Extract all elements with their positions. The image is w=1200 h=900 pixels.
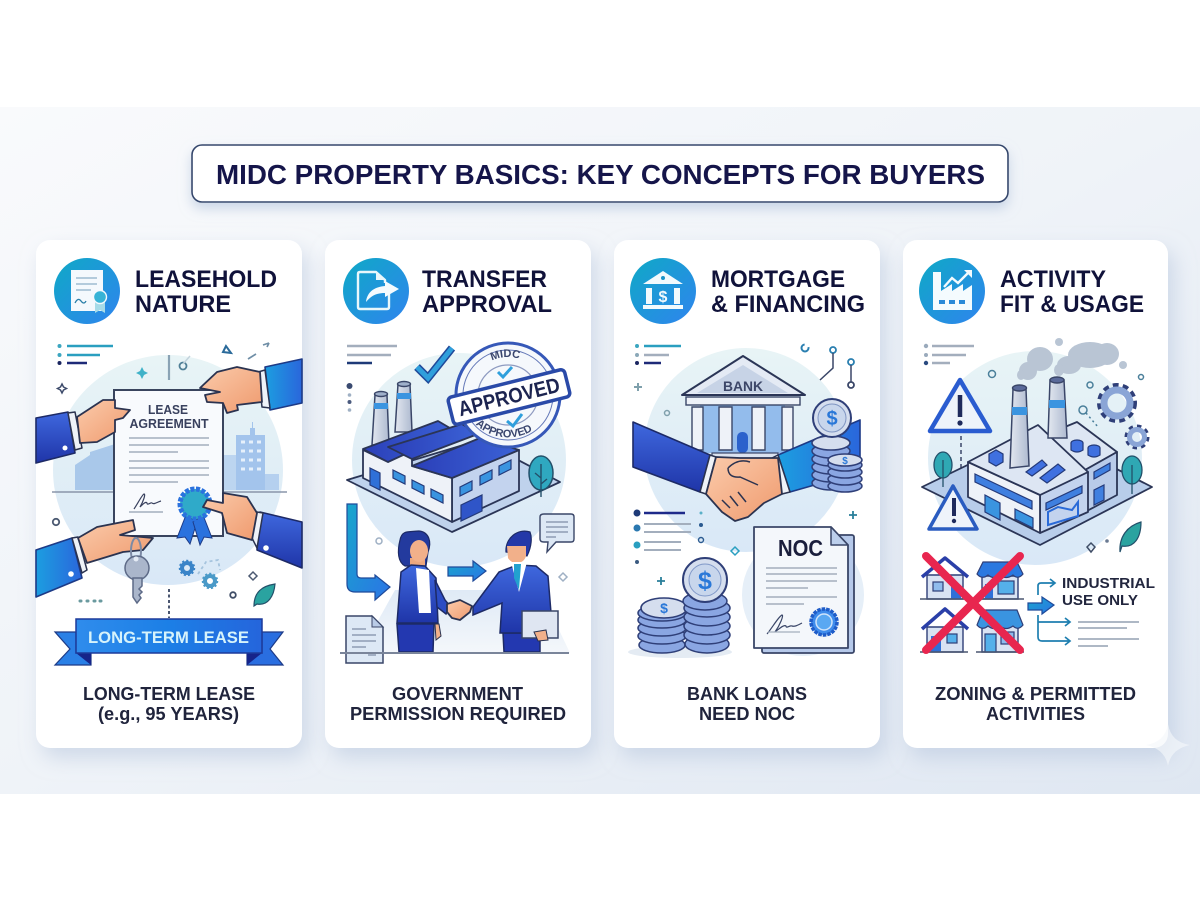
gears <box>1100 386 1147 447</box>
right arrow <box>448 561 486 581</box>
chimneys <box>1010 377 1067 468</box>
stamp: MIDC approved: MIDC <box>490 349 520 360</box>
chimneys <box>372 382 412 445</box>
NOC document: NOC <box>778 535 823 561</box>
panel: leasehold nature <box>36 240 302 748</box>
industrial use only label <box>1062 576 1155 646</box>
lease agreement document <box>114 390 223 536</box>
speech bubble <box>540 514 574 552</box>
bank building: BANK <box>723 378 763 394</box>
heading: & FINANCING <box>711 291 865 318</box>
coin stacks: $ <box>826 408 838 430</box>
red cross <box>926 556 1020 650</box>
banner: long-term lease: LONG-TERM LEASE <box>88 628 249 647</box>
small marks <box>1087 539 1109 552</box>
hand with key <box>36 520 153 603</box>
floor line <box>340 652 569 654</box>
icon: key <box>125 538 149 603</box>
list marks <box>924 344 974 365</box>
list marks lower <box>634 510 857 585</box>
caption: (e.g., 95 YEARS) <box>98 704 239 724</box>
house two <box>920 609 968 652</box>
illustration backdrop circle <box>928 351 1142 565</box>
caption <box>350 684 566 724</box>
icon: lease document <box>54 258 120 324</box>
small marks and circuit <box>634 344 854 416</box>
shop one <box>976 562 1024 599</box>
heading: NATURE <box>135 291 231 318</box>
list marks <box>346 346 397 412</box>
smoke <box>1017 338 1127 380</box>
coin stacks lower: $ <box>660 600 668 616</box>
lease agreement document: LEASE <box>148 403 188 417</box>
list marks <box>58 344 113 365</box>
stamp: MIDC approved: APPROVED <box>476 420 532 438</box>
houses and shops crossed out <box>920 556 1024 652</box>
factory building <box>968 422 1117 533</box>
caption: ACTIVITIES <box>986 704 1085 724</box>
stamp: MIDC approved <box>446 342 572 448</box>
background band <box>0 107 1200 794</box>
icon: document with arrow <box>343 258 409 324</box>
heading: ACTIVITY <box>1000 266 1106 293</box>
heading <box>1000 266 1144 318</box>
icon: bank: $ <box>659 289 668 306</box>
caption: PERMISSION REQUIRED <box>350 704 566 724</box>
factory ground plate <box>922 430 1152 545</box>
caption: ZONING & PERMITTED <box>935 684 1136 704</box>
tree <box>529 456 553 497</box>
sparkle <box>1146 724 1190 766</box>
warning sign small <box>929 486 977 529</box>
panel: transfer approval <box>324 240 604 764</box>
title: MIDC PROPERTY BASICS: KEY CONCEPTS FOR BUYERS <box>216 159 985 190</box>
industrial use only label: USE ONLY <box>1062 593 1138 609</box>
caption <box>935 684 1136 724</box>
panel: mortgage and financing <box>614 240 880 748</box>
ribbon seal <box>177 489 212 545</box>
shop two <box>976 610 1024 652</box>
illustration backdrop circle <box>53 355 283 585</box>
panel: activity fit and usage <box>903 240 1168 748</box>
title <box>192 145 1008 202</box>
skyline buildings <box>52 422 287 492</box>
icon: bank <box>630 258 696 324</box>
lease agreement document: AGREEMENT <box>130 417 209 431</box>
arrows <box>1028 579 1070 645</box>
icon: leaf <box>254 584 275 606</box>
caption: BANK LOANS <box>687 684 807 704</box>
small rings <box>988 370 1144 427</box>
caption: GOVERNMENT <box>392 684 523 704</box>
warning sign large <box>930 380 990 475</box>
man in suit <box>473 531 558 652</box>
illustration backdrop circle <box>644 348 848 552</box>
trees <box>934 452 1142 494</box>
handshake: sleeves and hands <box>633 420 860 521</box>
checkmark <box>417 348 452 378</box>
heading: APPROVAL <box>422 291 552 318</box>
list marks <box>635 344 681 365</box>
coin stacks lower: $ <box>698 567 712 595</box>
heading: LEASEHOLD <box>135 266 277 293</box>
heading <box>135 266 277 318</box>
industrial use only label: INDUSTRIAL <box>1062 576 1155 592</box>
hand: top left <box>36 400 130 463</box>
heading: TRANSFER <box>422 266 547 293</box>
heading <box>422 266 552 318</box>
coin stacks: $ <box>842 456 848 467</box>
small document <box>346 616 383 663</box>
handshake <box>447 600 472 620</box>
bank building <box>682 356 805 462</box>
stamp: MIDC approved: APPROVED <box>456 374 562 421</box>
hand: top right <box>200 359 302 413</box>
house one <box>920 558 968 599</box>
caption <box>687 684 807 724</box>
icon: factory with growth arrow <box>919 258 985 324</box>
pale floor panel behind people <box>360 590 570 653</box>
decorations <box>58 343 269 393</box>
coin stacks <box>812 399 862 492</box>
L-shaped arrow <box>347 504 390 600</box>
caption: LONG-TERM LEASE <box>83 684 255 704</box>
icon: leaf <box>1120 522 1141 552</box>
banner: long-term lease <box>55 619 283 665</box>
hand: bottom right <box>203 493 302 568</box>
gears and small marks <box>53 519 257 618</box>
checkmark highlight <box>417 348 452 378</box>
heading: MORTGAGE <box>711 266 845 293</box>
coin stacks lower <box>628 558 732 658</box>
illustration backdrop circle <box>352 353 566 567</box>
woman in suit <box>397 531 450 652</box>
caption: NEED NOC <box>699 704 795 724</box>
heading: FIT & USAGE <box>1000 291 1144 318</box>
caption <box>83 684 255 724</box>
small marks <box>376 538 567 581</box>
NOC document <box>742 527 864 656</box>
heading <box>711 266 865 318</box>
factory building <box>347 421 560 532</box>
